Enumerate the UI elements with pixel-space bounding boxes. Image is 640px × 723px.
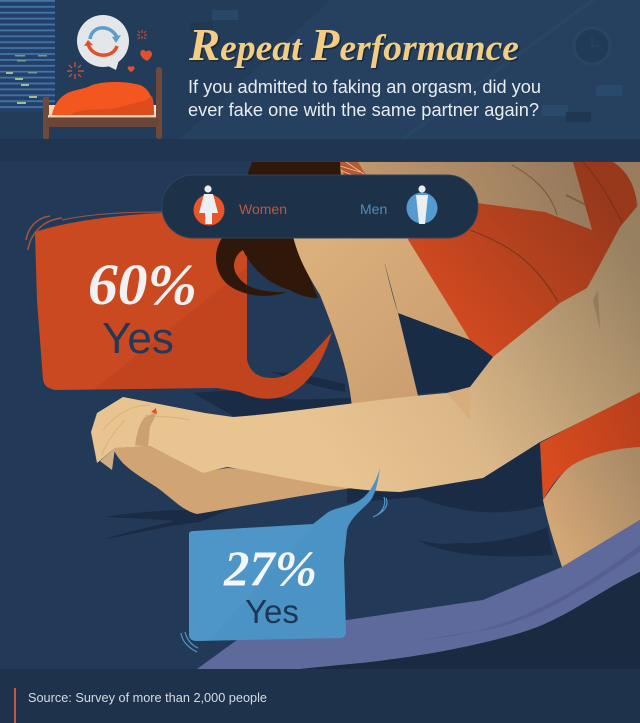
callout label: Yes: [102, 314, 174, 363]
illustration: hair: [216, 162, 345, 298]
illustration: torso below pill: [378, 238, 470, 340]
callout: women 60% yes: [26, 212, 332, 399]
subtitle: If you admitted to faking an orgasm, did you: [188, 77, 541, 97]
footer: [0, 669, 640, 723]
icon: woman: [194, 185, 224, 226]
callout value: 27%: [223, 540, 317, 596]
callout label: Yes: [245, 593, 299, 630]
icon: speech bubble with repeat arrows: [77, 15, 129, 70]
illustration: main arm and hand: [91, 203, 640, 492]
illustration: thigh: [543, 447, 640, 567]
title: Repeat Performance: [189, 20, 520, 72]
text: Repeat Performance: [188, 19, 519, 70]
illustration: back and torso: [338, 162, 640, 357]
illustration: dark floor shadow: [300, 572, 640, 669]
header background: [0, 0, 640, 139]
illustration: red top: [407, 162, 637, 357]
legend pill: [162, 175, 478, 238]
callout: men 27% yes: [181, 468, 387, 652]
band below header: [0, 139, 640, 161]
illustration: sheet folds: [105, 372, 553, 557]
icon: man: [406, 185, 438, 224]
illustration: purple sheet: [197, 520, 640, 669]
legend label: women: Women: [239, 201, 287, 217]
subtitle: ever fake one with the same partner again?: [188, 100, 539, 120]
icon: hearts and sparkles: [67, 30, 152, 79]
icon: bed with blanket: [43, 67, 162, 139]
illustration: red lower garment: [540, 390, 640, 500]
legend label: men: Men: [360, 201, 387, 217]
main illustration background: [0, 161, 640, 669]
illustration: shadowed area behind arm: [398, 313, 493, 394]
source note: Source: Survey of more than 2,000 people: [28, 690, 267, 705]
callout value: 60%: [88, 252, 197, 317]
illustration: upper arm: [293, 236, 418, 408]
illustration: lower forearm: [113, 446, 360, 514]
subtitle: [188, 77, 541, 120]
icon: window with blinds: [0, 0, 55, 112]
